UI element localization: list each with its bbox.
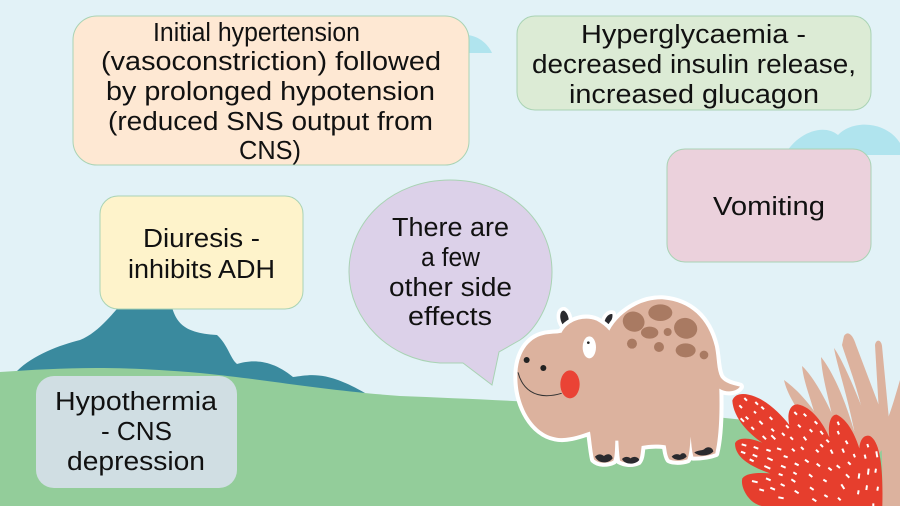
diuresis text: Diuresis - [143, 225, 260, 253]
hippo smile [518, 372, 562, 396]
hippo body [517, 299, 740, 463]
hippo back spots [620, 304, 708, 359]
bubble text: a few [421, 244, 481, 272]
hypertension text [101, 19, 441, 165]
plant red leaves and speckles [732, 394, 882, 506]
hyperglycaemia text: decreased insulin release, [532, 51, 856, 79]
hypertension text: Initial hypertension [153, 19, 360, 47]
diuresis text: inhibits ADH [128, 256, 275, 284]
hippo cheek [560, 370, 580, 398]
bubble text: effects [408, 303, 492, 331]
panel: hypothermia [36, 376, 237, 488]
hypertension text: (vasoconstriction) followed [101, 48, 441, 76]
hypothermia text: Hypothermia [55, 388, 218, 416]
mountain [17, 300, 365, 395]
panel: hypertension [73, 16, 469, 165]
hypothermia text [55, 388, 218, 476]
panel: vomiting [667, 149, 871, 262]
panel: diuresis [100, 196, 303, 309]
vomiting text: Vomiting [713, 193, 825, 221]
hypertension text: (reduced SNS output from [108, 108, 433, 136]
hippo ears [560, 311, 613, 327]
hyperglycaemia text: Hyperglycaemia - [581, 21, 806, 49]
hippo feet [595, 447, 713, 464]
bubble text [389, 214, 512, 331]
bubble text: other side [389, 274, 512, 302]
panel: hyperglycaemia [517, 16, 871, 110]
hyperglycaemia text [532, 21, 856, 109]
hill [0, 368, 900, 506]
plant fronds [784, 333, 900, 506]
diuresis text [128, 225, 275, 284]
plant [732, 333, 900, 506]
cloud: top centre [460, 35, 492, 53]
hippo nostrils [524, 357, 546, 371]
hyperglycaemia text: increased glucagon [569, 81, 819, 109]
hypertension text: CNS) [239, 137, 301, 165]
cloud: top right [785, 125, 900, 155]
hypothermia text: - CNS [101, 418, 172, 446]
bubble text: There are [392, 214, 509, 242]
hypothermia text: depression [67, 448, 205, 476]
speech bubble [349, 180, 552, 385]
hippo sticker [517, 299, 740, 464]
hypertension text: by prolonged hypotension [106, 78, 435, 106]
hippo eye [583, 336, 596, 358]
